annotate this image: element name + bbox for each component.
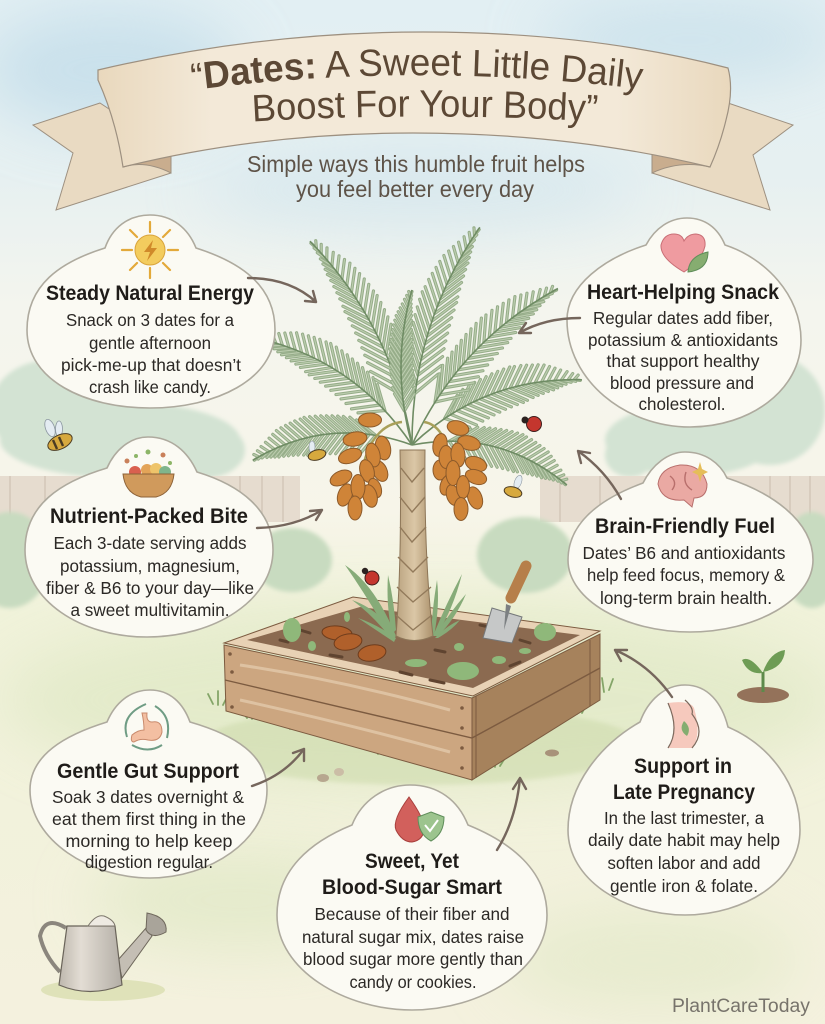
icon: brain with sparkle xyxy=(658,462,708,507)
body text: potassium & antioxidants xyxy=(588,330,778,350)
body text: potassium, magnesium, xyxy=(60,556,240,576)
body text: fiber & B6 to your day—like xyxy=(46,578,254,598)
heading: Sweet, Yet xyxy=(365,849,459,873)
bee near right cluster xyxy=(503,474,524,499)
icon: heart with leaf xyxy=(661,234,708,272)
body text: Each 3-date serving adds xyxy=(54,533,247,553)
icon: sun with bolt xyxy=(122,222,178,278)
bee near left cluster xyxy=(307,441,327,462)
body text: blood pressure and xyxy=(610,373,754,393)
body text: Regular dates add fiber, xyxy=(593,308,773,328)
body text xyxy=(46,533,254,620)
panel: steady natural energy xyxy=(27,215,275,408)
rim and soil xyxy=(224,597,600,696)
arrow: pregnancy to bed xyxy=(615,650,672,697)
date palm tree xyxy=(249,217,583,640)
raised garden bed xyxy=(200,565,640,785)
heading: Nutrient-Packed Bite xyxy=(50,504,248,528)
soil dates xyxy=(321,625,387,663)
bee left xyxy=(43,418,75,454)
body text: gentle afternoon xyxy=(89,333,211,353)
body text: natural sugar mix, dates raise xyxy=(302,927,524,947)
ladybug on plant xyxy=(362,568,379,585)
heading: Support in xyxy=(634,754,732,778)
arrow: heart to tree xyxy=(519,318,580,333)
heading xyxy=(322,849,502,899)
icon: pregnant belly xyxy=(668,700,699,748)
heading: Brain-Friendly Fuel xyxy=(595,514,775,538)
watermark: PlantCareToday xyxy=(672,996,810,1017)
body text: Because of their fiber and xyxy=(314,904,510,924)
body text: pick-me-up that doesn’t xyxy=(61,355,241,375)
trunk xyxy=(396,450,433,640)
arrow: energy to tree xyxy=(248,278,316,302)
arrow: blood sugar to bed xyxy=(497,778,526,850)
body text: Soak 3 dates overnight & xyxy=(52,787,244,807)
body text: Dates’ B6 and antioxidants xyxy=(582,543,786,563)
sprout xyxy=(737,650,789,703)
date clusters xyxy=(328,413,489,520)
wooden planks xyxy=(224,634,600,780)
heading xyxy=(613,754,755,804)
arrow: nutrient to tree xyxy=(257,510,322,528)
icon: stomach xyxy=(126,704,168,750)
body text xyxy=(582,543,786,608)
panel: gentle gut support xyxy=(30,690,267,878)
seedlings xyxy=(283,612,556,680)
body text: help feed focus, memory & xyxy=(587,565,785,585)
subtitle: Simple ways this humble fruit helps xyxy=(247,151,585,177)
icon: blood drop and shield xyxy=(395,797,444,842)
panel: heart-helping snack xyxy=(567,218,801,427)
banner ribbon xyxy=(33,32,793,210)
heading: Gentle Gut Support xyxy=(57,759,239,783)
body text: candy or cookies. xyxy=(350,972,476,992)
body text: soften labor and add xyxy=(608,853,760,873)
body text xyxy=(302,904,524,992)
body text: that support healthy xyxy=(606,351,760,371)
body text: long-term brain health. xyxy=(600,588,772,608)
subtitle xyxy=(247,151,585,202)
body text: daily date habit may help xyxy=(588,830,780,850)
ladybug on frond xyxy=(522,416,542,432)
panel: sweet yet blood-sugar smart xyxy=(277,785,547,1010)
background trees and fence xyxy=(0,355,825,608)
heading: Blood-Sugar Smart xyxy=(322,875,502,899)
arrow: brain to tree xyxy=(578,451,621,499)
spiky plants at trunk base xyxy=(345,565,466,642)
panel: nutrient-packed bite xyxy=(25,437,273,637)
body text: a sweet multivitamin. xyxy=(70,600,230,620)
body text xyxy=(52,787,246,872)
title xyxy=(191,49,644,128)
body text: morning to help keep xyxy=(66,831,232,851)
body text: crash like candy. xyxy=(89,377,211,397)
body text xyxy=(61,310,241,397)
ground shadow, grass and stones xyxy=(200,678,640,785)
heading: Late Pregnancy xyxy=(613,780,755,804)
watering can xyxy=(40,913,166,1001)
body text xyxy=(588,308,778,414)
arrow: gut to bed xyxy=(252,749,304,786)
body text: Snack on 3 dates for a xyxy=(66,310,234,330)
body text: In the last trimester, a xyxy=(604,808,764,828)
subtitle: you feel better every day xyxy=(296,176,534,202)
icon: trowel xyxy=(483,566,526,643)
body text: digestion regular. xyxy=(85,852,213,872)
heading: Steady Natural Energy xyxy=(46,281,254,305)
title: Boost For Your Body” xyxy=(254,90,598,128)
body text: blood sugar more gently than xyxy=(303,949,523,969)
body text: cholesterol. xyxy=(638,394,726,414)
heading: Heart-Helping Snack xyxy=(587,280,779,304)
title: “Dates: A Sweet Little Daily xyxy=(191,49,644,96)
palm fronds xyxy=(249,217,583,489)
body text xyxy=(588,808,780,896)
icon: bowl of fruit xyxy=(123,450,174,497)
body text: eat them first thing in the xyxy=(52,809,246,829)
panel: brain-friendly fuel xyxy=(568,452,813,632)
body text: gentle iron & folate. xyxy=(610,876,758,896)
panel: support in late pregnancy xyxy=(568,685,800,915)
ribbon tails xyxy=(33,103,793,210)
